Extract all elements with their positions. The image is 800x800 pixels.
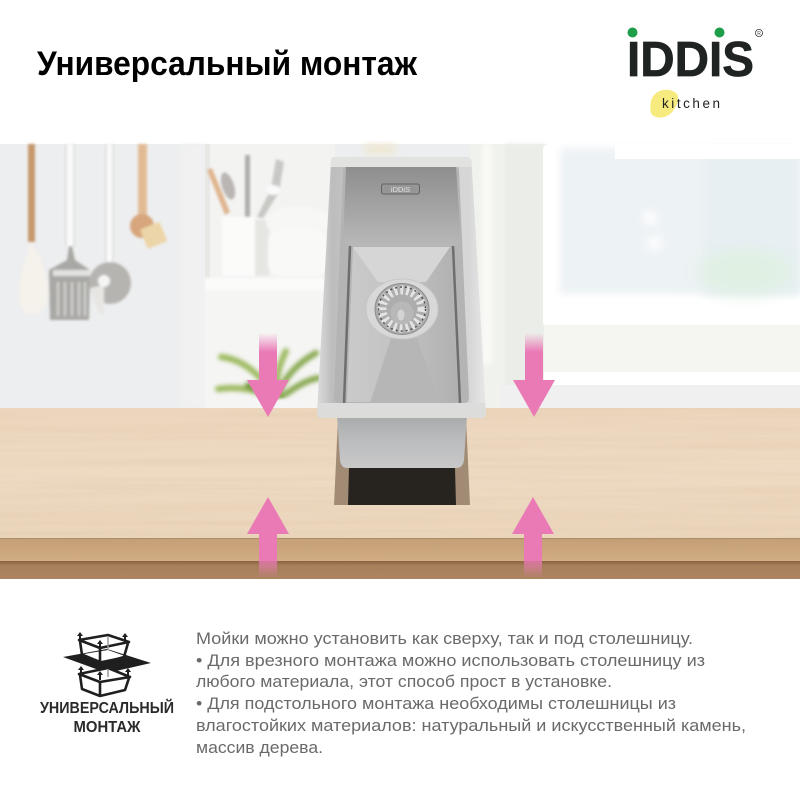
description text: [196, 629, 746, 757]
description text: • Для врезного монтажа можно использовать столешницу из: [196, 651, 705, 670]
arrow: top left, pointing down: [247, 333, 289, 417]
countertop cutout: [334, 418, 470, 505]
side wall shadow lines: [344, 246, 460, 403]
icon: universal mounting: [63, 632, 151, 696]
icon caption: УНИВЕРСАЛЬНЫЙ: [40, 699, 174, 717]
potted plant: [218, 351, 318, 409]
description text: массив дерева.: [196, 738, 323, 757]
icon caption: МОНТАЖ: [74, 719, 141, 736]
shelf with cup and cutlery: [205, 155, 330, 408]
basin side walls: [334, 167, 469, 403]
description text: Мойки можно установить как сверху, так и под столешницу.: [196, 629, 693, 648]
basin floor: [347, 247, 458, 402]
sink underside: [337, 416, 467, 468]
logo: IDDIS kitchen: R: [757, 31, 761, 37]
wooden countertop: [0, 408, 800, 579]
arrow: top right, pointing down: [513, 333, 555, 417]
photo background: blurred kitchen interior: [0, 144, 800, 408]
sink: stainless steel basin: [317, 157, 486, 418]
description text: любого материала, этот способ прост в установке.: [196, 672, 612, 691]
logo: IDDIS kitchen: IDDIS: [627, 33, 754, 87]
icon caption: [40, 699, 174, 736]
arrow: bottom left, pointing up: [247, 497, 289, 578]
logo: IDDIS kitchen: kitchen: [662, 96, 720, 111]
title: Универсальный монтаж: [37, 45, 418, 83]
logo: IDDIS kitchen: [627, 28, 763, 118]
brand plate: iDDiS: [391, 185, 410, 194]
basin back wall: [343, 167, 461, 246]
arrow: bottom right, pointing up: [512, 497, 554, 578]
drain strainer: [366, 279, 438, 339]
brand plate: [382, 184, 420, 194]
sink rim: [317, 157, 486, 418]
description text: влагостойких материалов: натуральный и искусственный камень,: [196, 716, 746, 735]
hanging kitchen utensils: [19, 144, 167, 320]
rim top and front strips: [317, 157, 486, 418]
description text: • Для подстольного монтажа необходимы столешницы из: [196, 694, 676, 713]
floor light panels: [353, 247, 450, 403]
